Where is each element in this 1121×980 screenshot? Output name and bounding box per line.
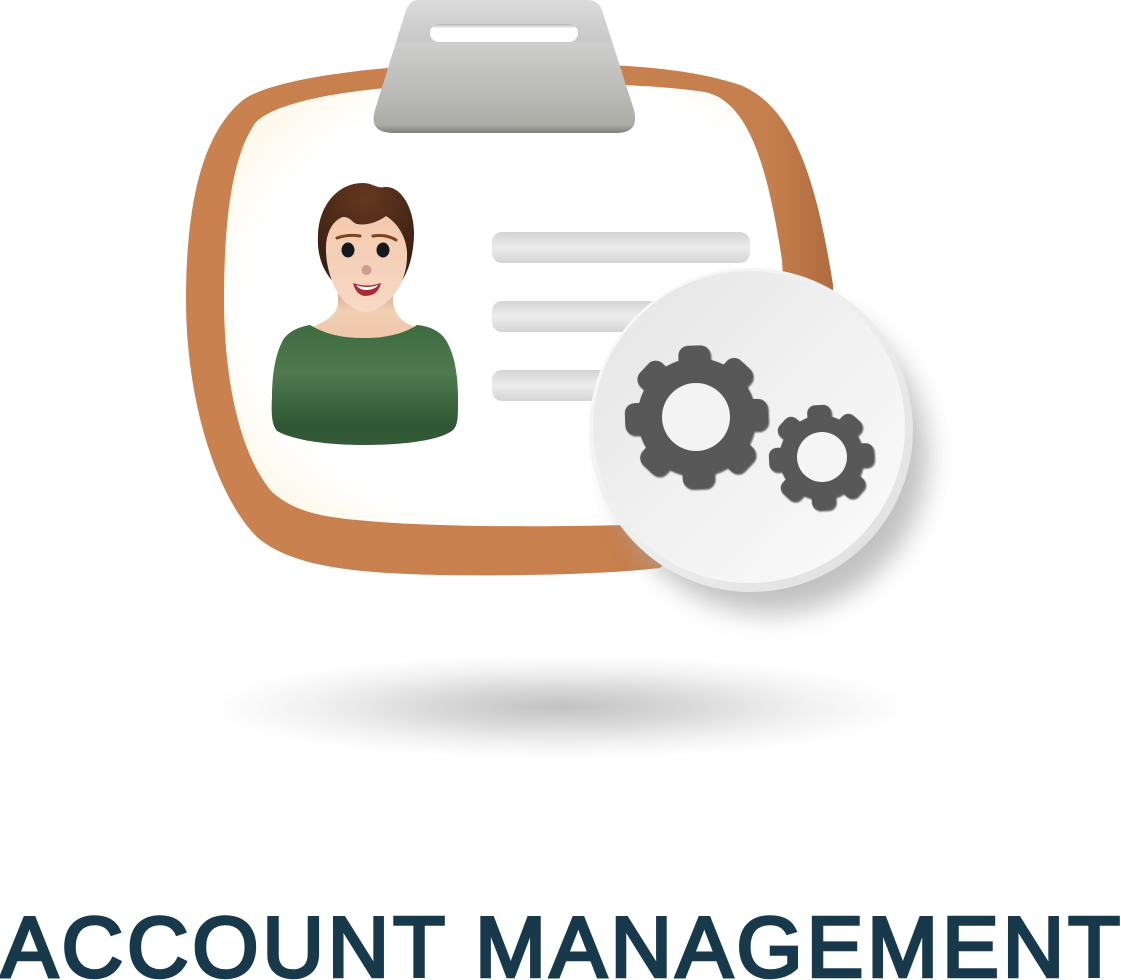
neck	[312, 290, 415, 338]
large gear hole	[662, 383, 730, 451]
clip slot	[430, 24, 578, 42]
ground shadow	[210, 655, 910, 759]
id badge	[186, 0, 833, 575]
badge frame	[186, 63, 833, 575]
badge clip	[374, 0, 635, 133]
avatar	[272, 183, 458, 445]
shirt	[272, 325, 458, 445]
small gear hole	[797, 432, 847, 482]
nose	[362, 265, 372, 275]
face	[326, 216, 407, 312]
circle shadow	[612, 298, 928, 614]
small gear	[766, 402, 877, 513]
circle face	[593, 271, 905, 583]
circle rim	[589, 268, 913, 592]
eyebrows	[337, 235, 396, 240]
eyes	[342, 242, 390, 258]
mouth	[353, 283, 381, 296]
badge paper	[224, 83, 790, 526]
large gear	[623, 343, 770, 491]
hair	[318, 183, 414, 284]
text lines	[492, 232, 750, 401]
settings badge	[589, 268, 928, 614]
